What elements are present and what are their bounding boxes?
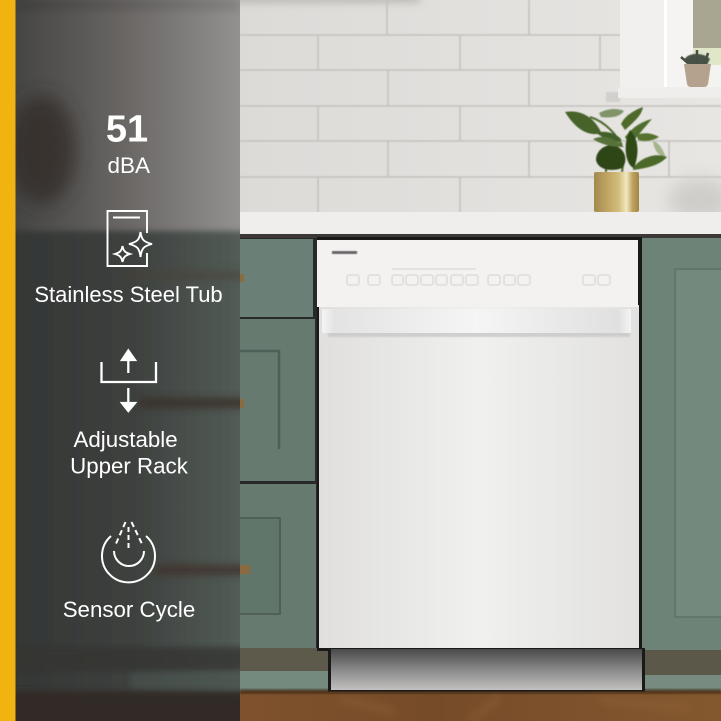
feature: adjustable upper rack: Upper Rack <box>70 454 189 478</box>
feature: stainless steel tub <box>34 211 223 307</box>
icon: tub with sparkles <box>108 211 152 266</box>
icon: rack with up and down arrows <box>102 350 156 411</box>
label: Sensor Cycle <box>63 597 195 622</box>
door handle <box>322 309 631 337</box>
countertop <box>240 212 721 238</box>
kitchen background wall <box>0 0 721 214</box>
toe kick <box>331 649 642 690</box>
label: Adjustable <box>74 427 178 452</box>
dark translucent side panel <box>16 0 240 721</box>
icon: spray and dial <box>102 522 155 582</box>
small potted succulent <box>681 50 711 87</box>
control panel <box>317 240 638 307</box>
dishwasher <box>317 237 645 692</box>
stat: 51 dBA: 51 <box>106 108 148 150</box>
feature: adjustable upper rack <box>70 350 189 478</box>
dishwasher door <box>319 305 639 648</box>
stat: 51 dBA <box>106 108 150 178</box>
label: Stainless Steel Tub <box>34 282 223 307</box>
window frame and glass <box>606 0 721 102</box>
stat: 51 dBA: dBA <box>108 153 150 178</box>
floor <box>0 689 721 721</box>
cabinets <box>240 238 721 695</box>
cabinet pulls <box>240 274 250 574</box>
wall shadow behind plant <box>668 178 721 222</box>
feature: sensor cycle <box>63 522 195 622</box>
yellow side stripe <box>0 0 16 721</box>
gold pot plant <box>565 107 667 212</box>
